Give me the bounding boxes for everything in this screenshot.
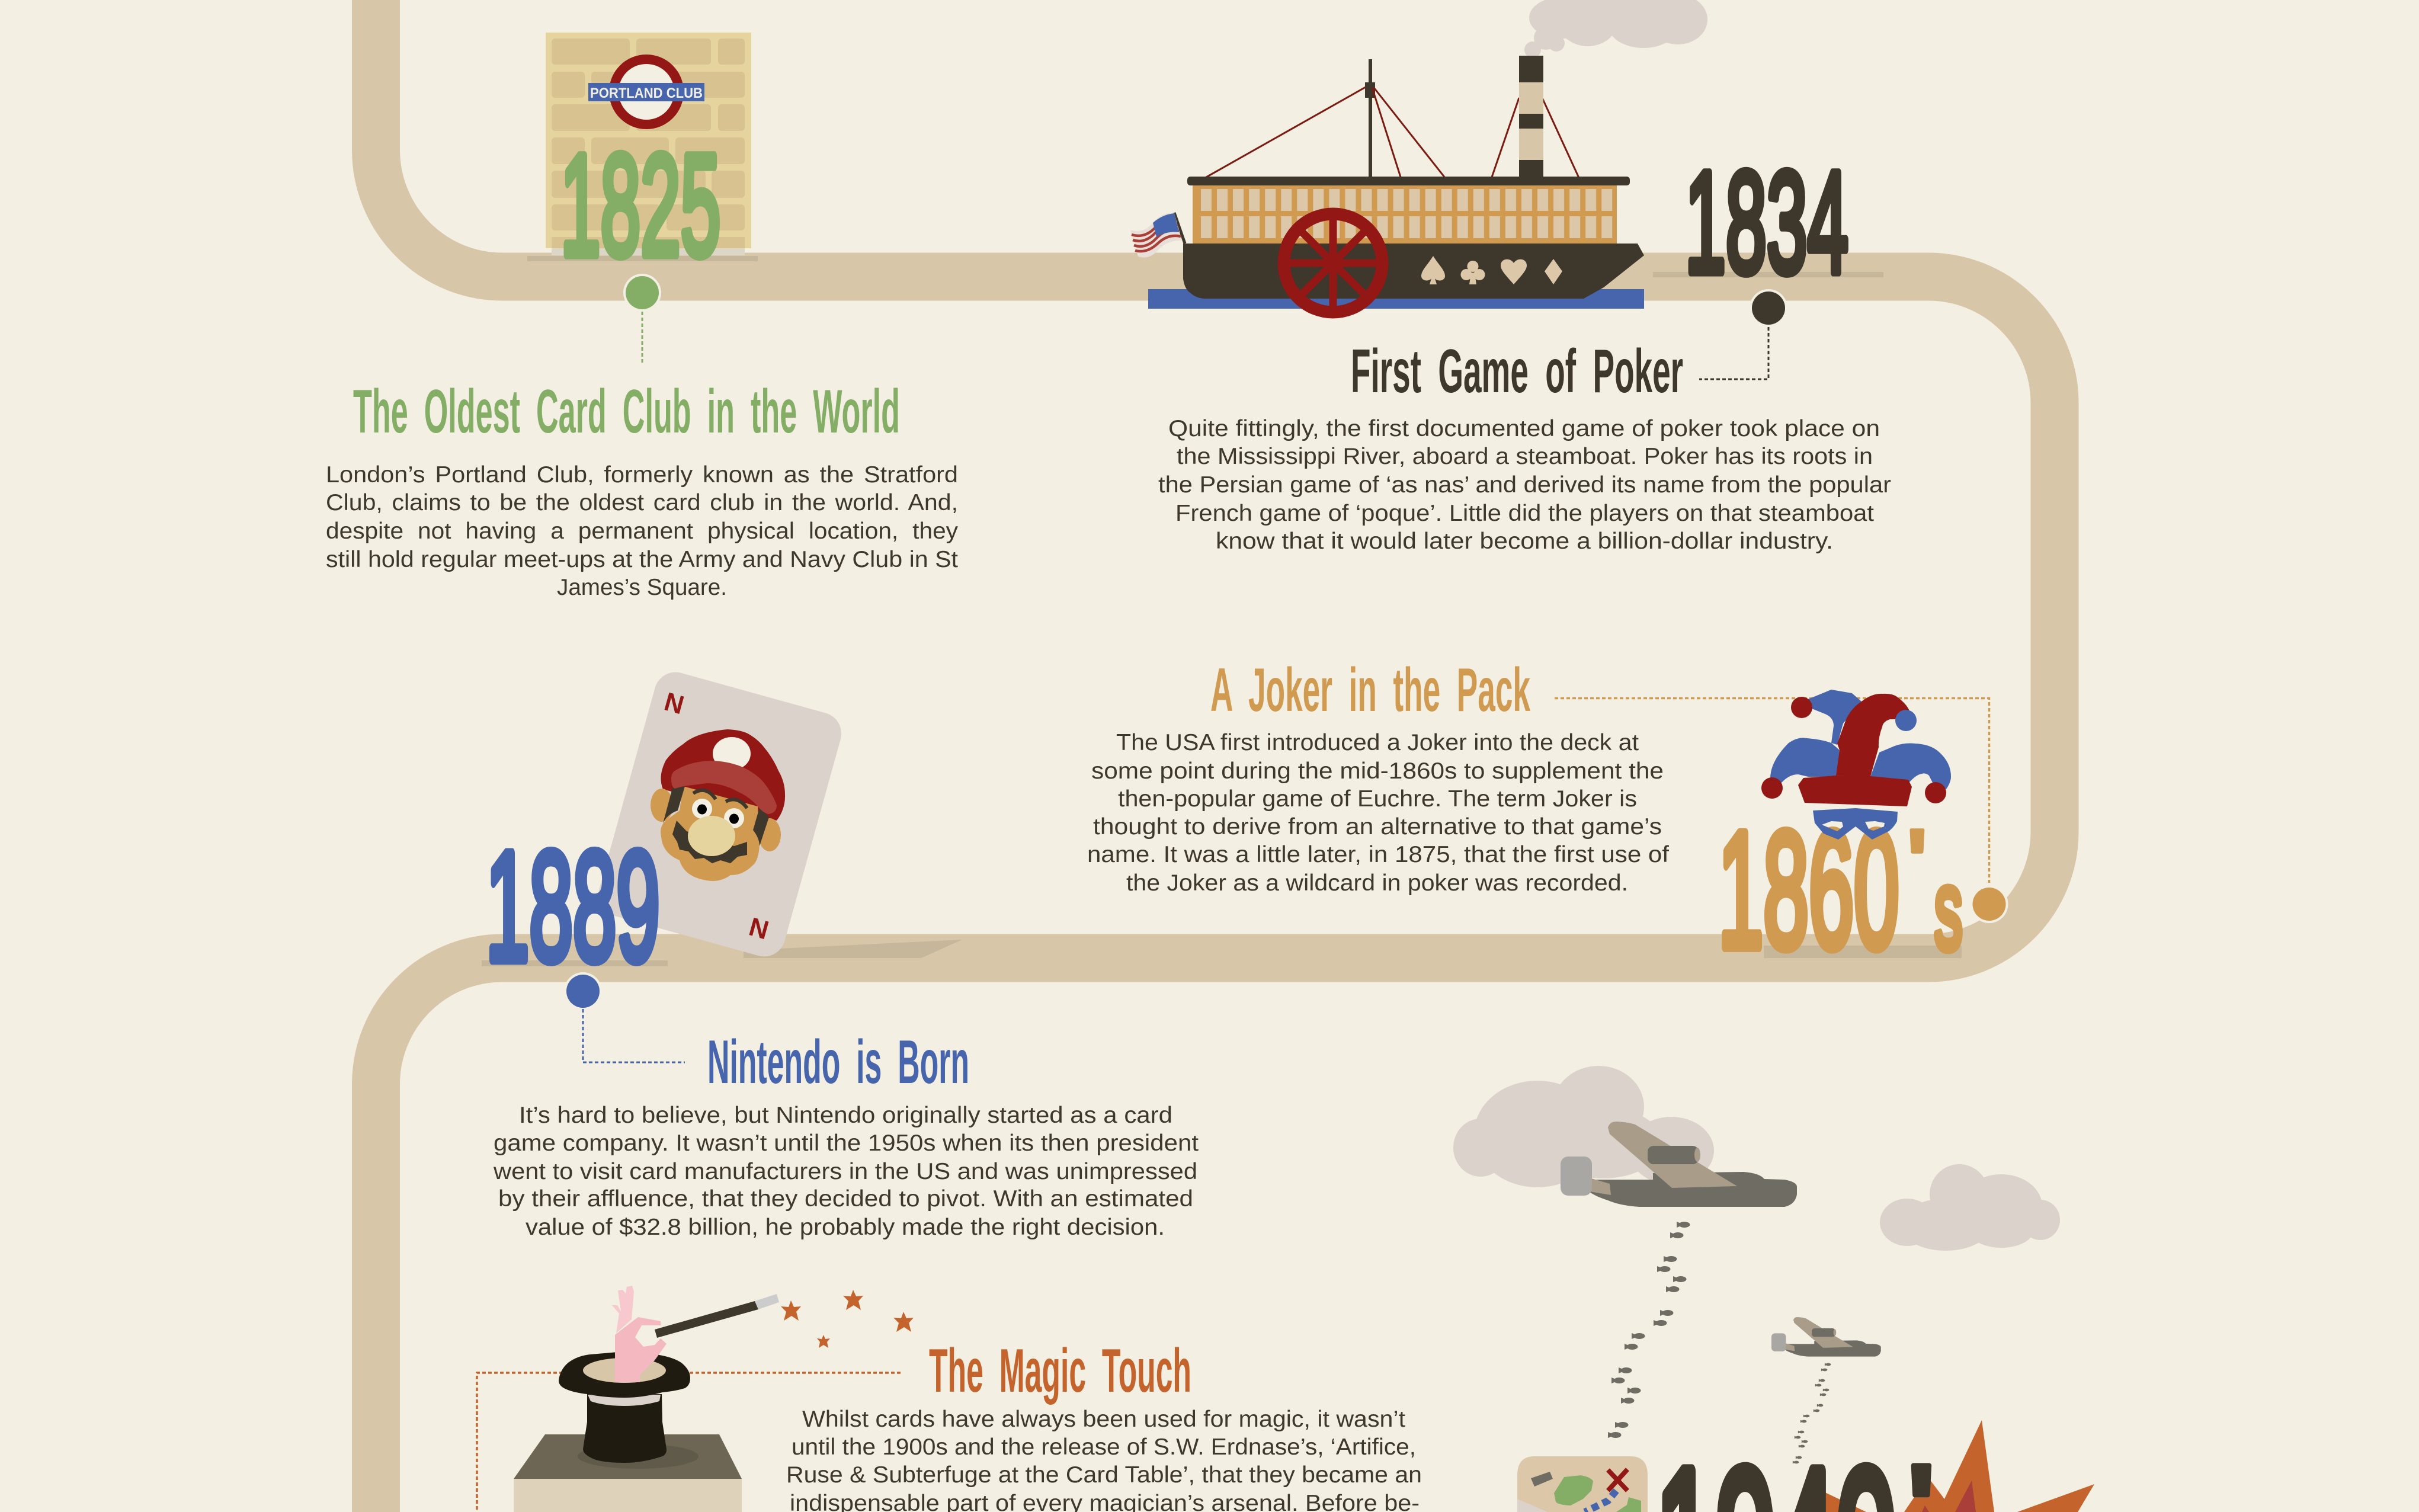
body text: despite not having a permanent physical location, they — [326, 518, 959, 544]
ground shadow — [1653, 272, 1883, 277]
connector — [641, 312, 643, 364]
icon: large bomber — [1561, 1122, 1797, 1207]
body text: game company. It wasn’t until the 1950s when its then president — [494, 1130, 1199, 1156]
body text: still hold regular meet-ups at the Army and Navy Club in St — [326, 547, 958, 572]
body text: then-popular game of Euchre. The term Joker is — [1118, 786, 1637, 812]
panel: magic touch — [477, 1286, 1422, 1512]
connector — [1555, 698, 1989, 883]
body text — [1158, 416, 1891, 554]
body text: the Mississippi River, aboard a steamboat. Poker has its roots in — [1177, 444, 1873, 469]
marker — [623, 274, 661, 312]
body text: French game of ‘poque’. Little did the players on that steamboat — [1175, 501, 1874, 526]
ground shadow — [482, 960, 668, 966]
american flag — [1130, 213, 1185, 258]
icon: stars — [781, 1290, 914, 1348]
year 1834: 1834 — [1685, 142, 1848, 303]
icon: brick wall with roundel: PORTLAND CLUB — [590, 85, 703, 101]
icon: cloud right — [1880, 1164, 2060, 1251]
marker — [1971, 885, 2008, 923]
marker — [1750, 289, 1787, 327]
card suits — [1421, 256, 1562, 284]
connector — [1699, 327, 1768, 379]
paddle wheel — [1284, 214, 1382, 312]
body text: thought to derive from an alternative to that game’s — [1093, 814, 1662, 840]
body text: name. It was a little later, in 1875, that the first use of — [1087, 842, 1669, 867]
panel: 1940s war — [1453, 1066, 2094, 1512]
card shadow — [744, 940, 962, 958]
panel: magic touch: The Magic Touch — [929, 1337, 1191, 1405]
connector — [477, 1373, 901, 1512]
icon: playing card with plumber: N — [661, 687, 687, 720]
body text — [326, 462, 959, 600]
body text: Ruse & Subterfuge at the Card Table’, that they became an — [786, 1462, 1422, 1488]
year 1860's: 1860 — [1718, 799, 1899, 982]
body text: by their affluence, that they decided to pivot. With an estimated — [498, 1186, 1193, 1212]
icon: steamboat — [1130, 0, 1707, 312]
body text: The USA first introduced a Joker into the deck at — [1116, 730, 1639, 755]
panel: 1825 oldest card club — [326, 33, 959, 600]
year 1860's: s — [1934, 847, 1962, 972]
timeline path — [376, 0, 2055, 1512]
heading: First Game of Poker — [1351, 337, 1683, 406]
body text: London’s Portland Club, formerly known as the Stratford — [326, 462, 958, 488]
body text: the Joker as a wildcard in poker was recorded. — [1126, 870, 1628, 896]
icon: treasure map — [1517, 1456, 1648, 1512]
icon: playing card with plumber: N — [746, 912, 772, 945]
icon: explosion — [1818, 1420, 2094, 1512]
heading: The Oldest Card Club in the World — [353, 377, 900, 446]
body text — [786, 1407, 1422, 1512]
icon: cloud left — [1453, 1066, 1714, 1187]
heading: A Joker in the Pack — [1210, 656, 1530, 725]
body text: know that it would later become a billion-dollar industry. — [1216, 528, 1833, 554]
connector — [583, 1009, 685, 1062]
icon: playing card with plumber — [594, 667, 846, 962]
body text: the Persian game of ‘as nas’ and derived its name from the popular — [1158, 472, 1891, 498]
body text: It’s hard to believe, but Nintendo originally started as a card — [519, 1103, 1172, 1128]
icon: magician hat, hand and wand — [514, 1286, 779, 1512]
body text: Whilst cards have always been used for magic, it wasn’t — [802, 1407, 1405, 1432]
panel: 1834 first game of poker — [1130, 0, 1891, 554]
ground shadow — [1764, 946, 1962, 958]
panel: 1889 nintendo: Nintendo is Born — [707, 1028, 969, 1097]
body text: until the 1900s and the release of S.W. Erdnase’s, ‘Artifice, — [792, 1434, 1416, 1460]
icon: brick wall with roundel — [546, 33, 751, 255]
marker — [564, 972, 602, 1010]
panel: 1889 nintendo — [482, 667, 1199, 1240]
body text: some point during the mid-1860s to supplement the — [1091, 758, 1664, 784]
year 1860's: ' — [1907, 811, 1928, 910]
smoke cloud — [1524, 0, 1707, 58]
bombs: small — [1793, 1363, 1831, 1463]
body text — [493, 1103, 1199, 1240]
ground shadow — [527, 256, 758, 261]
icon: jester hat and mask — [1761, 690, 1951, 840]
body text: Quite fittingly, the first documented game of poker took place on — [1168, 416, 1880, 441]
year 1889: 1889 — [486, 819, 660, 993]
icon: small bomber — [1771, 1317, 1881, 1357]
bombs: large — [1608, 1222, 1690, 1438]
body text: James’s Square. — [557, 575, 727, 600]
body text: went to visit card manufacturers in the US and was unimpressed — [493, 1159, 1197, 1184]
body text: value of $32.8 billion, he probably made the right decision. — [526, 1215, 1165, 1240]
body text: Club, claims to be the oldest card club in the world. And, — [326, 490, 958, 515]
body text — [1087, 730, 1669, 896]
panel: 1860s joker — [1087, 656, 2008, 982]
year 1825: 1825 — [560, 124, 720, 286]
